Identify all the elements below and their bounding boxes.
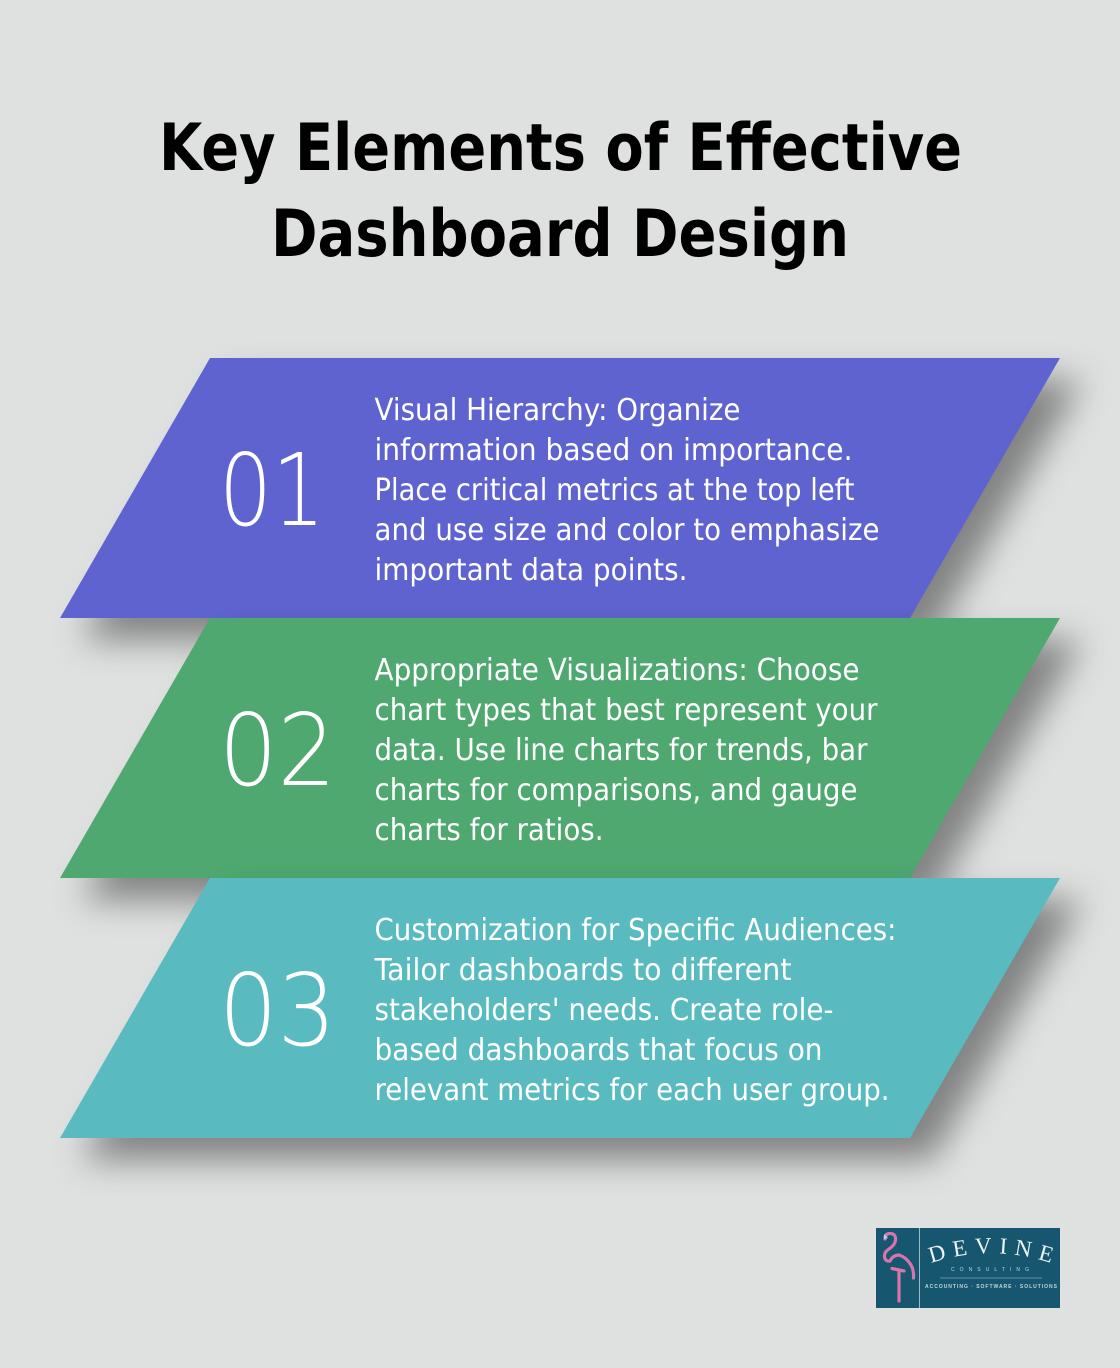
logo: Devine Consulting <box>876 1228 1060 1308</box>
panel: step 01 visual hierarchy: information based on importance. <box>374 433 852 468</box>
panel: step 02 appropriate visualizations: Appropriate Visualizations: Choose <box>374 653 860 688</box>
panel: step 02 appropriate visualizations <box>60 618 1082 900</box>
title: Key Elements of Effective <box>159 111 962 186</box>
panel: step 02 appropriate visualizations: chart types that best represent your <box>374 693 878 728</box>
panel: step 01 visual hierarchy: Visual Hierarchy: Organize <box>374 393 740 428</box>
panel: step 02 appropriate visualizations: charts for ratios. <box>374 813 604 848</box>
panel: step 01 visual hierarchy: Place critical metrics at the top left <box>374 473 855 508</box>
panel: step 03 customization for audiences: Customization for Specific Audiences: <box>374 913 896 948</box>
panel: step 03 customization for audiences <box>60 878 1082 1160</box>
panel: step 01 visual hierarchy: important data points. <box>374 553 688 588</box>
panel: step 02 appropriate visualizations: data. Use line charts for trends, bar <box>374 733 868 768</box>
logo: Devine Consulting: ACCOUNTING · SOFTWARE · SOLUTIONS <box>925 1284 1058 1290</box>
title <box>159 111 962 272</box>
logo: Devine Consulting: CONSULTING <box>951 1267 1029 1273</box>
panel: step 02 appropriate visualizations: 02 <box>219 692 336 809</box>
panel: step 01 visual hierarchy <box>60 358 1082 640</box>
panel: step 03 customization for audiences: Tailor dashboards to different <box>374 953 792 988</box>
panel: step 01 visual hierarchy: and use size and color to emphasize <box>374 513 880 548</box>
panel: step 03 customization for audiences: stakeholders' needs. Create role- <box>374 993 834 1028</box>
panel: step 03 customization for audiences: relevant metrics for each user group. <box>374 1073 890 1108</box>
panel: step 03 customization for audiences: based dashboards that focus on <box>374 1033 822 1068</box>
panel: step 03 customization for audiences: 03 <box>219 952 336 1069</box>
panel: step 02 appropriate visualizations: charts for comparisons, and gauge <box>374 773 858 808</box>
panel: step 01 visual hierarchy: 01 <box>219 432 325 549</box>
logo: Devine Consulting: DEVINE <box>928 1238 1053 1263</box>
title: Dashboard Design <box>271 197 849 272</box>
